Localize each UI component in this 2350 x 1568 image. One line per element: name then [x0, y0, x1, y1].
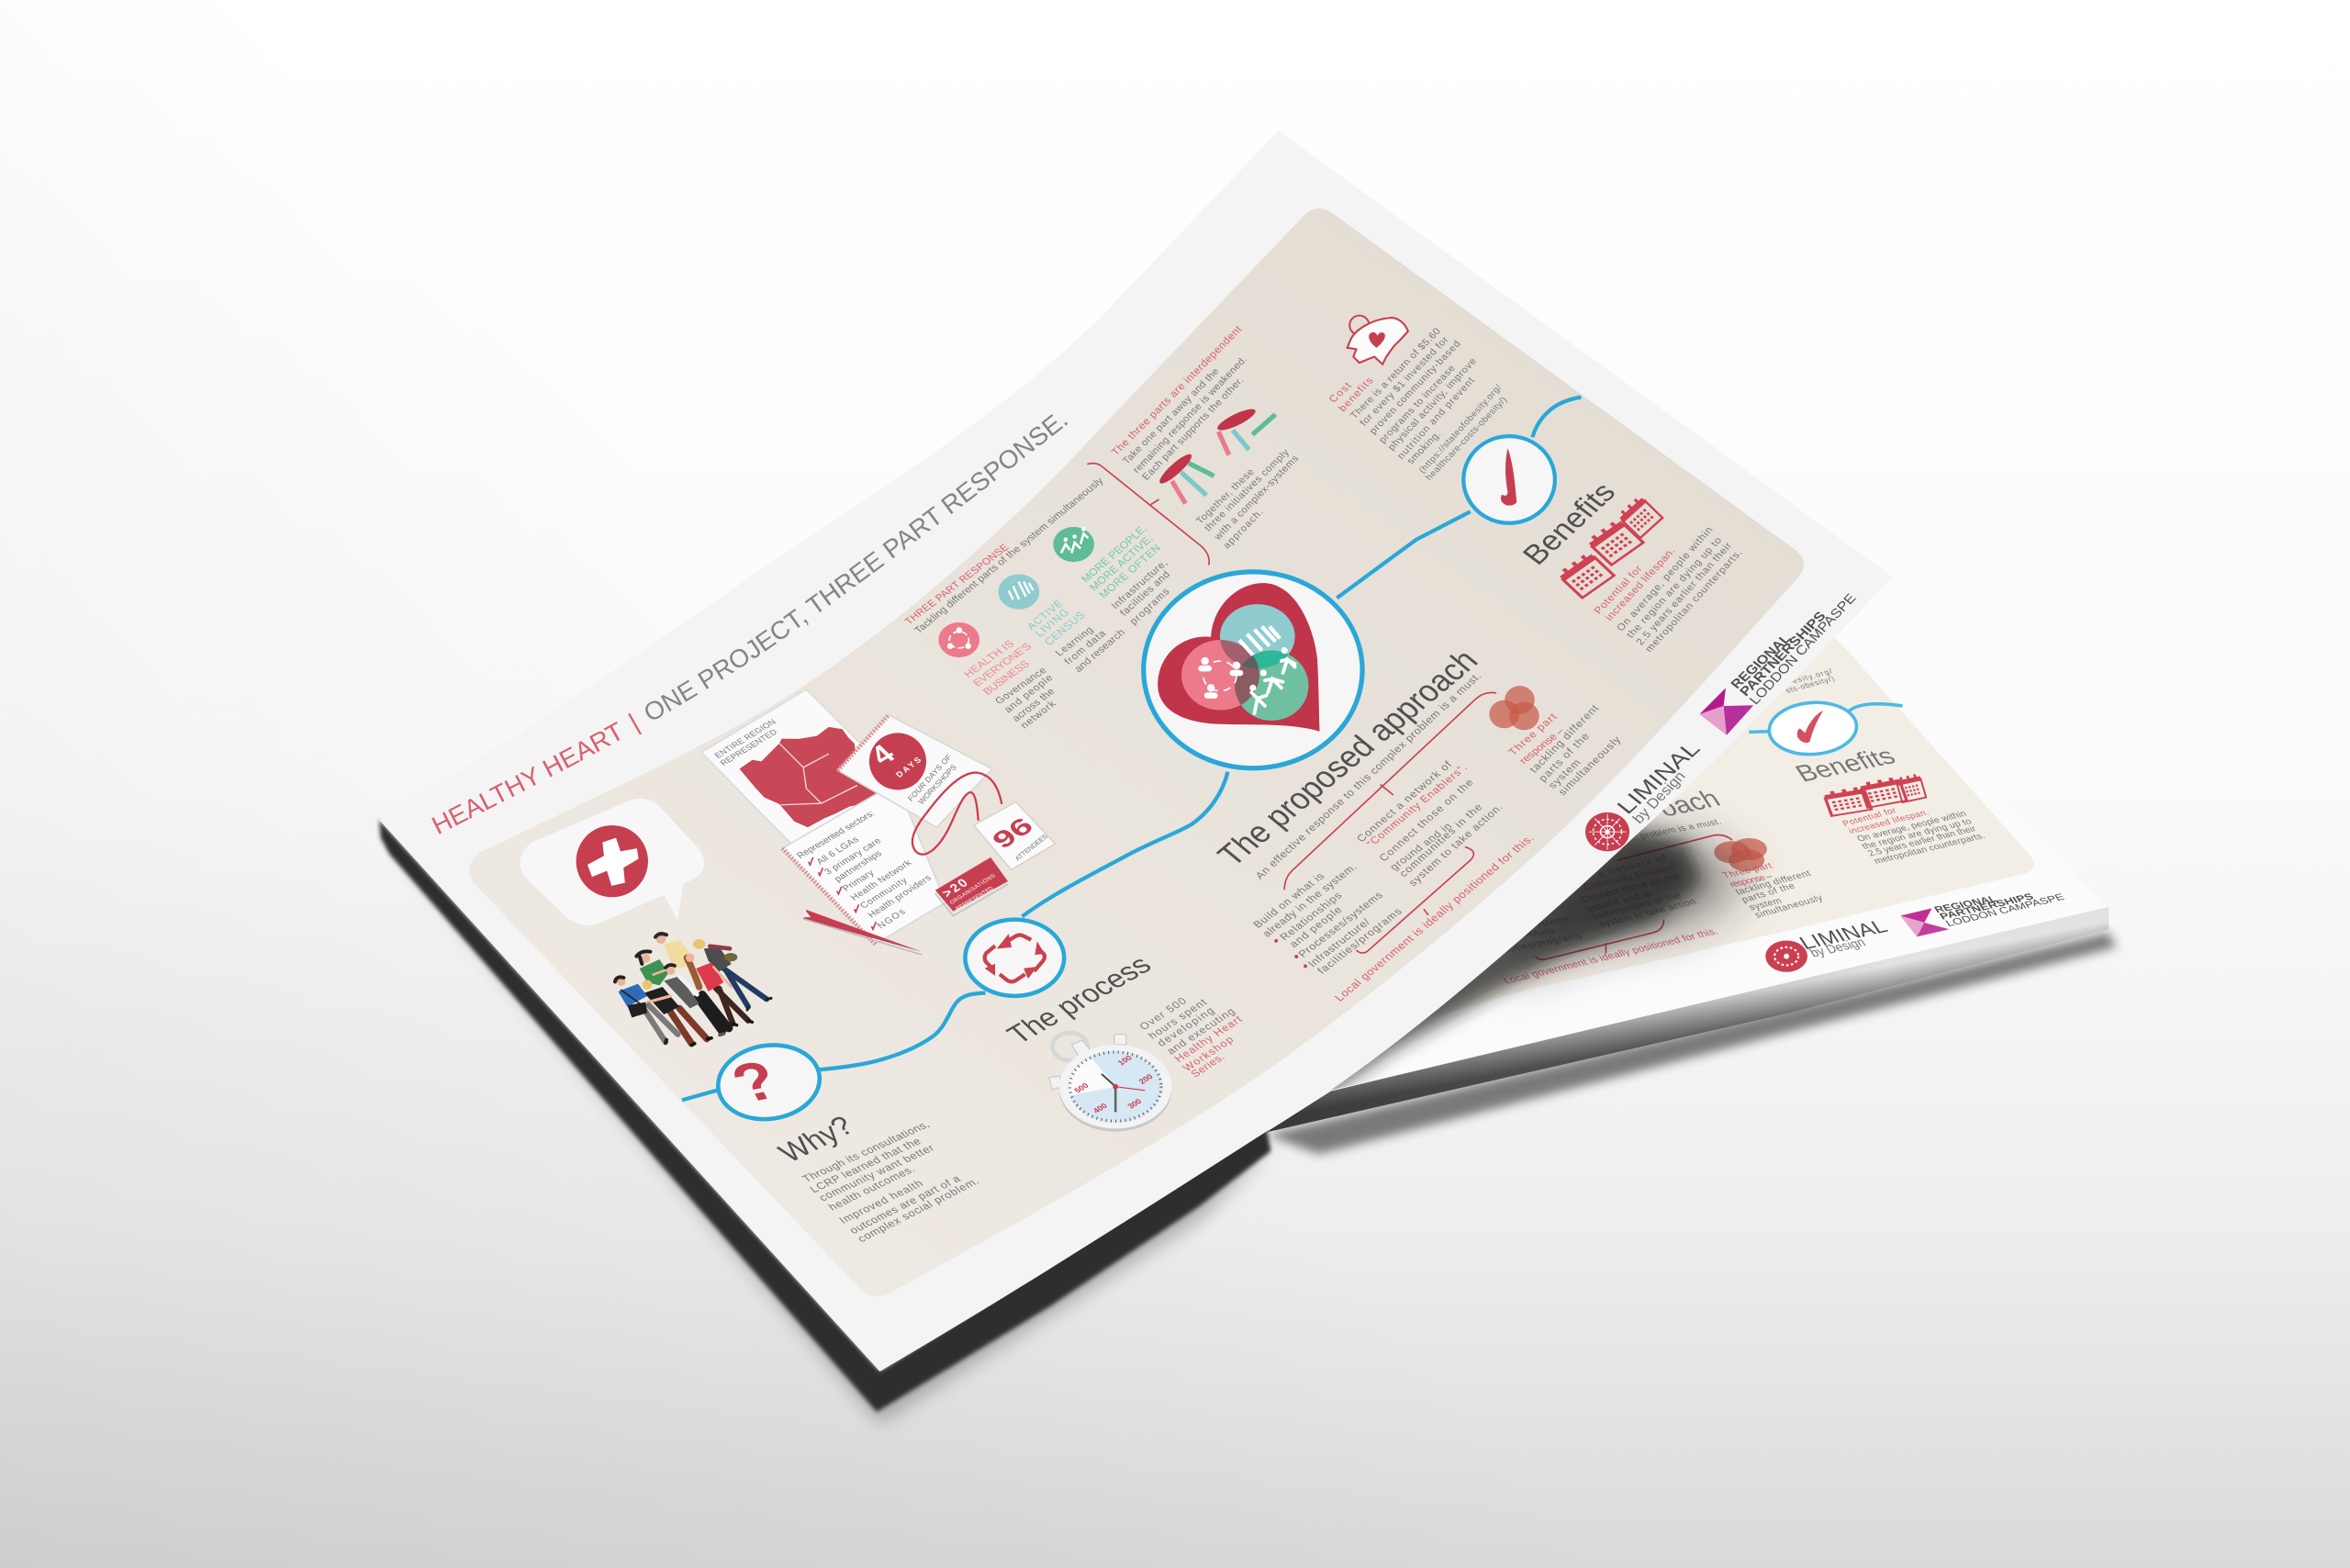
the process section: developing [1155, 1005, 1217, 1048]
region map [740, 727, 888, 827]
icon: calendars [1557, 495, 1662, 598]
list: connect network: communities in the [1397, 801, 1485, 879]
why circle with question mark [713, 1038, 824, 1126]
the process section: Over 500 [1137, 995, 1190, 1033]
icon: stool broken [1215, 406, 1275, 455]
interdependent text: Take one part away and the [1121, 366, 1222, 466]
list: connect network: system to take action. [1406, 801, 1505, 889]
back approach text: communities in the [1590, 891, 1684, 922]
four days card [838, 715, 992, 827]
icon: white runners [1251, 659, 1295, 713]
check circle [1463, 436, 1555, 523]
why section: complex social problem. [855, 1175, 981, 1245]
why section: Why? [771, 1110, 860, 1168]
the process section: hours spent [1146, 997, 1210, 1041]
four days card: FOUR DAYS OF [906, 752, 953, 803]
interdependent text: with a complex-systems [1212, 454, 1301, 543]
regional partnerships logo: LODDON CAMPASPE [1747, 591, 1860, 708]
liminal logo: LIMINAL [1613, 737, 1706, 819]
back path and check circle [1749, 700, 1902, 757]
benefits section: increased lifespan. [1604, 546, 1678, 622]
represented sectors note [782, 782, 946, 945]
the process section: and executing [1164, 1006, 1237, 1057]
column: active living census: Learning [1054, 625, 1096, 658]
icon: stopwatch: 400 [1091, 1102, 1109, 1114]
column: more people: facilities and [1118, 569, 1172, 618]
column: active living census: LIVING [1033, 607, 1072, 640]
the proposed approach section: The proposed approach [1210, 644, 1485, 872]
interdependent text: three initiatives comply [1203, 447, 1292, 533]
cost benefits text: physical activity, improve [1386, 356, 1479, 453]
column: health is everyone's business: and people [1002, 673, 1056, 715]
list: connect network: Connect a network of [1355, 759, 1455, 845]
the process section: Series. [1189, 1051, 1227, 1080]
represented sectors note: Health Network [849, 858, 914, 902]
represented sectors note: Primary [841, 868, 878, 893]
list: build on: Infrastructure/ [1305, 916, 1373, 969]
benefits section: the region are dying up to [1625, 535, 1724, 640]
interdependent text: Each part supports the other. [1140, 375, 1246, 483]
back approach text: problem is a must. [1638, 817, 1724, 841]
benefits section: Benefits [1516, 477, 1623, 571]
back benefits text: metropolitan counterparts. [1873, 832, 1987, 867]
attendees lanyard card [912, 773, 1055, 869]
organisations tag: ORGANISATIONS [948, 873, 997, 906]
back approach text: a network of [1596, 854, 1669, 879]
back benefits text: Potential for [1841, 806, 1899, 829]
shadow cast on back sheet [1274, 829, 1746, 1116]
the proposed approach section [1210, 644, 1623, 1003]
title: HEALTHY HEART|ONE PROJECT, THREE PART RESPONSE. [431, 414, 1069, 834]
icon: active people circle [1053, 527, 1094, 562]
list: connect network: ground and in [1387, 821, 1455, 872]
why section [771, 1110, 981, 1245]
three part response note: tackling different [1528, 702, 1602, 775]
the process section: Workshop [1181, 1034, 1237, 1073]
attendees lanyard card: ATTENDEES [1013, 833, 1049, 862]
heart [1158, 583, 1320, 732]
back approach text: system to take action. [1597, 897, 1701, 930]
interdependent text: remaining response is weakened. [1131, 354, 1249, 476]
back approach text: system [1747, 897, 1784, 913]
venn circles [1181, 604, 1308, 721]
why section: LCRP learned that the [807, 1136, 923, 1195]
the process section: The process [1000, 950, 1158, 1049]
column: health is everyone's business [962, 638, 1058, 731]
back benefits text: increased lifespan. [1847, 808, 1930, 836]
back approach text [1502, 785, 1826, 986]
icon: white census bars [1239, 626, 1280, 655]
icon: piggy bank [1348, 316, 1408, 364]
back approach text: ground and in [1584, 890, 1655, 914]
back logos: PARTNERSHIPS [1938, 891, 2036, 922]
back benefits text: On average, people within [1855, 810, 1969, 844]
column: health is everyone's business: network [1018, 699, 1058, 731]
heart circle [1144, 572, 1362, 768]
column: active living census: ACTIVE [1024, 598, 1066, 633]
back approach text: Local government is ideally positioned for this. [1502, 926, 1720, 986]
benefits section: metropolitan counterparts. [1643, 548, 1745, 655]
three part response section: THREE PART RESPONSE [902, 543, 1012, 627]
list: build on: already in the system. [1260, 862, 1360, 939]
back approach text: Connect those on the [1579, 872, 1682, 905]
back logos: REGIONAL [1932, 894, 2000, 915]
column: active living census: CENSUS [1042, 610, 1088, 648]
column: health is everyone's business: HEALTH IS [962, 638, 1017, 680]
back panel [1348, 626, 2034, 1042]
column: more people: programs [1128, 587, 1172, 627]
column: health is everyone's business: across the [1011, 687, 1058, 723]
list: build on: and people [1287, 904, 1345, 950]
interdependent text: The three parts are interdependent [1110, 324, 1245, 458]
icon: stopwatch [1049, 1033, 1171, 1132]
bracket: approach [1284, 692, 1496, 953]
regional partnerships logo: PARTNERSHIPS [1738, 610, 1830, 700]
icon: stool complete [1157, 451, 1214, 504]
blue journey path [682, 398, 1581, 1100]
icon: census circle [999, 574, 1039, 610]
icon: small venn [1489, 686, 1539, 730]
cost benefits text: (https://stateofobesity.org/ [1417, 383, 1505, 476]
interdependent text [1110, 324, 1301, 551]
three part response note [1506, 702, 1623, 798]
back benefits text [1784, 666, 1987, 867]
column: more people: MORE OFTEN [1097, 543, 1163, 600]
back approach text: ilities/programs [1505, 932, 1584, 954]
regional partnerships logo [1699, 591, 1860, 735]
back approach text: Community Enablers”. [1582, 862, 1683, 892]
front sheet drop shadow [379, 820, 1274, 1424]
column: more people: MORE PEOPLE, [1080, 522, 1150, 585]
cost benefits text: benefits [1337, 375, 1376, 414]
back approach text: response – [1728, 872, 1774, 890]
back benefits text: esity.org/ [1790, 666, 1835, 685]
benefits section: Potential for [1593, 564, 1645, 616]
why section: outcomes are part of a [846, 1172, 963, 1237]
benefits section: 2.5 years earlier than their [1634, 541, 1735, 647]
icon: health circle [938, 622, 979, 657]
process circle with cycle arrows [965, 920, 1064, 996]
back benefits text: 2.5 years earlier than their [1866, 824, 1979, 858]
column: health is everyone's business: BUSINESS [980, 658, 1033, 698]
back approach text: ructure/ [1519, 927, 1557, 939]
back logos: LODDON CAMPASPE [1943, 892, 2066, 929]
organisations tag [935, 857, 1008, 916]
interdependent text: Together, these [1194, 467, 1257, 526]
back benefits text: Benefits [1790, 743, 1901, 788]
column: active living census: from data [1062, 628, 1109, 666]
column: active living census [1024, 598, 1127, 675]
liminal logo [1585, 737, 1706, 851]
cost benefits text [1327, 326, 1509, 482]
bracket: three part [1087, 464, 1209, 566]
map card: ENTIRE REGION [712, 718, 778, 760]
column: health is everyone's business: EVERYONE'S [970, 641, 1035, 689]
list: connect network: “Community Enablers”. [1364, 762, 1470, 849]
represented sectors note: Represented sectors: [795, 809, 878, 860]
represented sectors note: NGOs [876, 908, 908, 931]
beige content panel [469, 208, 1804, 1296]
back logos: LIMINAL [1795, 916, 1892, 953]
three part response note: Three part [1506, 711, 1560, 757]
benefits section: On average, people within [1615, 525, 1716, 633]
speech bubble with medical cross [520, 799, 704, 925]
column: health is everyone's business: Governance [993, 666, 1049, 706]
four days card: DAYS [894, 756, 923, 779]
icon: stopwatch: 300 [1125, 1097, 1144, 1111]
why section: Through its consultations, [800, 1118, 933, 1184]
list: build on: Processes/systems [1296, 890, 1385, 959]
represented sectors note: 3 primary care [822, 836, 884, 877]
benefits section [1516, 477, 1745, 655]
column: more people [1080, 522, 1172, 627]
icon: stopwatch: 500 [1072, 1081, 1091, 1094]
why section: health outcomes. [825, 1163, 918, 1213]
icon: stopwatch: 200 [1136, 1072, 1155, 1086]
cost benefits text: healthcare-costs-obesity/) [1424, 396, 1509, 482]
three part response note: simultaneously [1556, 734, 1623, 798]
cost benefits text: for every $1 invested for [1358, 335, 1451, 428]
three part response note: system [1546, 757, 1583, 790]
cost benefits text: There is a return of $5.60 [1348, 326, 1443, 420]
back approach text: ystems [1534, 915, 1572, 930]
back sheet [1267, 619, 2116, 1154]
cost benefits text: proven community-based [1367, 339, 1463, 436]
column: more people: Infrastructure, [1110, 558, 1170, 611]
liminal logo: by Design [1629, 768, 1689, 826]
interdependent text: approach. [1221, 507, 1266, 551]
back logos [1765, 891, 2066, 972]
organisations tag: REPRESENTED [955, 885, 995, 912]
map card [701, 689, 900, 844]
cost benefits text: smoking. [1404, 430, 1443, 466]
the proposed approach section: Local government is ideally positioned for this. [1332, 833, 1537, 1003]
list: connect network [1355, 759, 1505, 889]
the process section [1000, 950, 1246, 1132]
back approach text: parts of the [1740, 881, 1797, 905]
back approach text: simultaneously [1753, 893, 1826, 920]
why section: community want better [816, 1142, 937, 1204]
attendees lanyard card: 96 [986, 812, 1039, 854]
three part response note: parts of the [1537, 731, 1592, 784]
map card: REPRESENTED [718, 727, 779, 767]
cost benefits text: nutrition and prevent [1395, 375, 1477, 461]
represented sectors note: Community [858, 876, 911, 911]
back benefits text: the region are dying up to [1861, 817, 1974, 852]
front sheet [379, 130, 1893, 1372]
cost benefits text: Cost [1327, 380, 1355, 405]
column: active living census: and research [1072, 627, 1127, 675]
three part response section [902, 476, 1172, 731]
icon: white people network [1198, 657, 1243, 699]
why circle with question mark: ? [722, 1049, 789, 1114]
the process section: Healthy Heart [1172, 1014, 1246, 1064]
back logos: by Design [1807, 936, 1868, 960]
regional partnerships logo: REGIONAL [1729, 632, 1795, 692]
list: connect network: Connect those on the [1377, 778, 1476, 864]
list: build on: Build on what is [1251, 871, 1327, 930]
column: more people: MORE ACTIVE, [1088, 533, 1156, 593]
cost benefits text: programs to increase [1377, 364, 1458, 445]
represented sectors note: Health providers [867, 874, 934, 920]
list: build on [1251, 862, 1404, 976]
four days card: 4 [864, 739, 901, 770]
list: build on: facilities/programs [1315, 906, 1404, 976]
represented sectors note: partnerships [833, 849, 884, 884]
back approach text: tackling different [1734, 869, 1813, 897]
people group illustration [615, 934, 771, 1045]
three part response note: response – [1516, 725, 1567, 766]
three part response section: Tackling different parts of the system simultaneously [912, 476, 1106, 636]
pencil [803, 910, 922, 955]
list: build on: Relationships [1278, 890, 1345, 943]
represented sectors note: All 6 LGAs [814, 835, 861, 867]
the proposed approach section: An effective response to this complex problem is a must. [1253, 670, 1483, 881]
back benefits text: sts-obesity/) [1784, 674, 1836, 695]
back approach text: oach [1652, 785, 1726, 823]
why section: Improved health [836, 1178, 925, 1226]
icon: stopwatch: 100 [1115, 1054, 1134, 1067]
four days card: WORKSHOPS [916, 762, 958, 806]
back approach text: Three part [1721, 862, 1774, 880]
organisations tag: >20 [938, 876, 970, 900]
